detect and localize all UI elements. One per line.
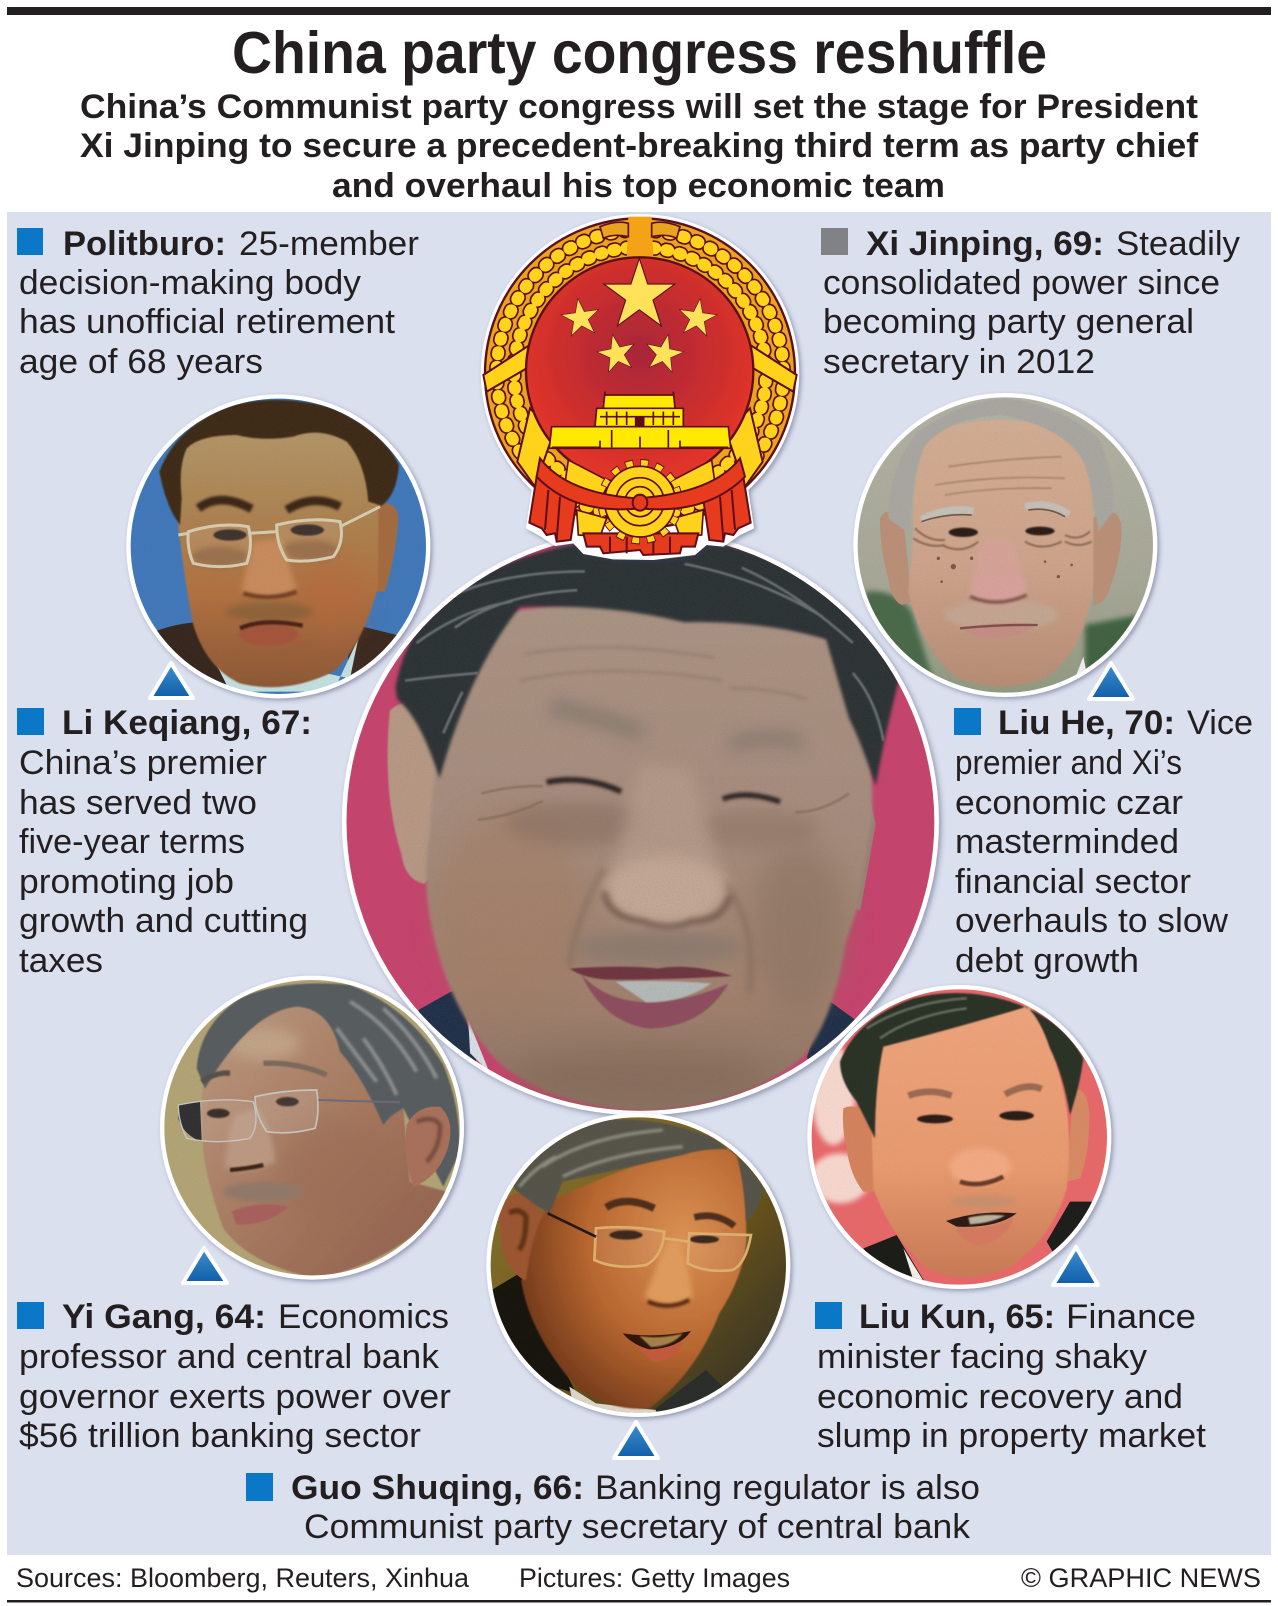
footer: sources and credits: Sources: Bloomberg, Reuters, Xinhua [16,1563,469,1593]
wheat bundles by the gear [565,460,715,537]
text block: Li Keqiang: has served two [19,784,257,822]
text block: Liu Kun: Finance [1066,1298,1196,1336]
text block: Xi Jinping: Steadily [1116,225,1241,263]
subtitle: China’s Communist party congress will set the stage for President [80,88,1199,126]
text block: Liu Kun: Liu Kun, 65: [859,1298,1055,1336]
text block: Liu He: masterminded [955,823,1179,861]
text block: Liu He: Vice [1187,704,1253,742]
text block: Yi Gang: Yi Gang, 64: [62,1298,266,1336]
text block: Liu He: financial sector [955,863,1191,901]
legend square: blue [954,708,981,735]
text block: Politburo: decision-making body [19,264,362,302]
text block: Li Keqiang: Li Keqiang, 67: [62,704,312,742]
title: China party congress reshuffle [232,20,1047,86]
text block: Li Keqiang: growth and cutting [19,902,308,940]
legend square: blue [17,1302,44,1329]
text block: Yi Gang: Economics [278,1298,449,1336]
text block: Xi Jinping: becoming party general [823,303,1194,341]
text block: Liu He: debt growth [955,942,1139,980]
text block: Xi Jinping: Xi Jinping, 69: [866,225,1104,263]
text block: Guo Shuqing [246,1469,980,1546]
text block: Li Keqiang: taxes [19,942,103,980]
text block: Politburo: 25-member [239,225,419,263]
diagonal yellow bars [483,338,797,487]
legend square: grey [821,228,848,255]
text block: Xi Jinping: secretary in 2012 [823,343,1095,381]
legend square: blue [815,1302,842,1329]
subtitle [80,88,1199,205]
text block: Li Keqiang: promoting job [19,863,234,901]
text block: Liu Kun: economic recovery and [817,1378,1183,1416]
text block: Guo Shuqing: Communist party secretary of central bank [304,1508,971,1546]
red ribbon [537,458,745,511]
arrow marker: Guo Shuqing [614,1422,658,1458]
arrow marker: Yi Gang [183,1248,227,1283]
text block: Liu He: premier and Xi’s [955,744,1182,782]
Tiananmen gate [549,392,731,448]
text block: Liu Kun [815,1298,1206,1455]
icon: China national emblem [481,214,799,560]
text block: Liu He: economic czar [955,784,1183,822]
portrait: Liu Kun [800,975,1120,1295]
portrait: Li Keqiang [120,385,440,705]
gear [603,464,677,539]
subtitle: Xi Jinping to secure a precedent-breaking third term as party chief [80,127,1199,165]
portrait: Yi Gang [150,965,470,1285]
text block: Politburo [17,225,419,381]
legend square: blue [246,1473,273,1501]
text block: Politburo: age of 68 years [19,343,263,381]
text block: Xi Jinping: consolidated power since [823,264,1220,302]
red drapes [529,477,751,555]
text block: Liu Kun: slump in property market [817,1417,1206,1455]
text block: Liu He: overhauls to slow [955,902,1228,940]
text block: Guo Shuqing: Guo Shuqing, 66: [291,1469,584,1507]
text block: Yi Gang [17,1298,451,1455]
arrow marker: Liu Kun [1053,1247,1098,1285]
text block: Li Keqiang: China’s premier [19,744,267,782]
red disc [526,257,753,485]
arrow marker: Liu He [1089,663,1133,699]
legend square: blue [17,228,43,255]
emblem white outline [481,214,799,560]
footer: sources and credits: © GRAPHIC NEWS [1021,1563,1261,1593]
text block: Liu Kun: minister facing shaky [817,1338,1148,1376]
stars [559,258,719,374]
subtitle: and overhaul his top economic team [332,167,945,205]
text block: Li Keqiang [17,704,312,980]
text block: Yi Gang: $56 trillion banking sector [19,1417,421,1455]
top rule [7,7,1271,15]
text block: Politburo: Politburo: [63,225,226,263]
text block: Liu He: Liu He, 70: [998,704,1175,742]
wheat ring [485,217,795,528]
footer: sources and credits: Pictures: Getty Images [519,1563,790,1593]
portrait: Liu He [845,385,1165,705]
legend square: blue [17,708,44,735]
portrait: Xi Jinping [340,528,941,1121]
text block: Yi Gang: governor exerts power over [19,1378,451,1416]
portrait: Guo Shuqing [476,1100,796,1420]
text block: Guo Shuqing: Banking regulator is also [595,1469,980,1507]
text block: Politburo: has unofficial retirement [19,303,395,341]
arrow marker: Li Keqiang [150,663,193,698]
text block: Xi Jinping [821,225,1241,381]
text block: Li Keqiang: five-year terms [19,823,245,861]
text block: Liu He [954,704,1253,980]
footer: sources and credits [16,1563,1261,1593]
text block: Yi Gang: professor and central bank [19,1338,440,1376]
